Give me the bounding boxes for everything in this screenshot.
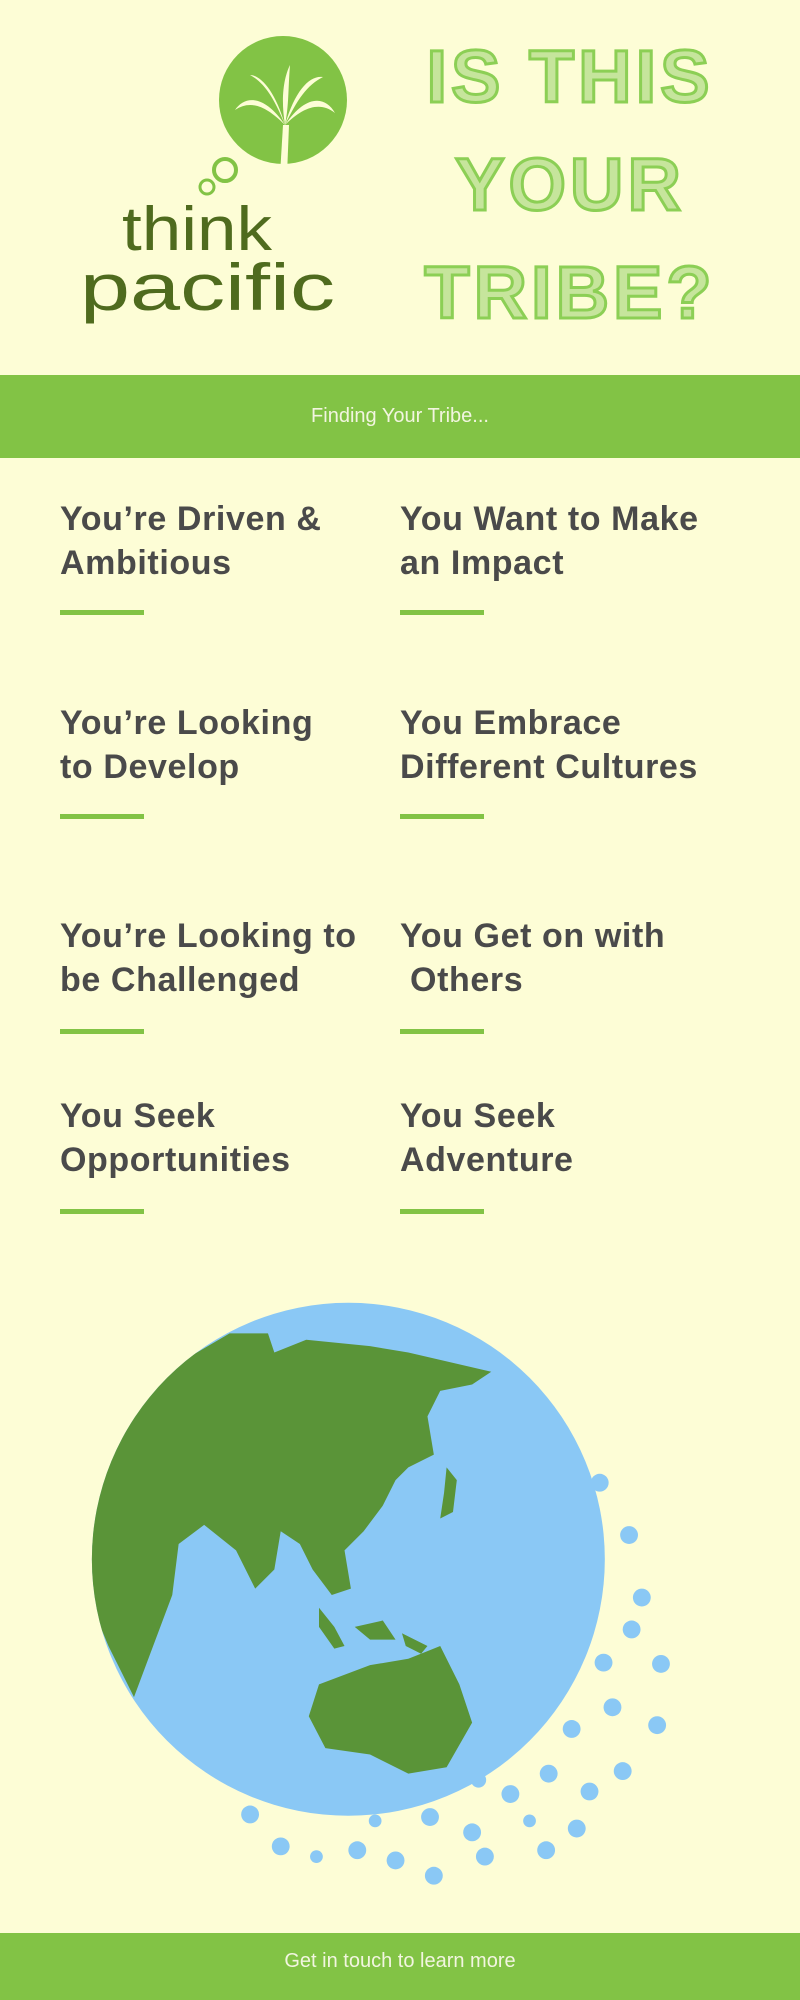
item 4: [400, 704, 698, 786]
item 4: Different Cultures: [400, 748, 698, 786]
footer banner: [0, 1933, 800, 2000]
icon: palm circle: [200, 36, 347, 194]
item 2: You Want to Make: [400, 500, 699, 538]
item 7: [60, 1097, 291, 1179]
logo text: think: [122, 195, 273, 264]
item 6: You Get on with: [400, 917, 665, 955]
globe illustration: [92, 1302, 670, 1885]
item 5: [60, 917, 357, 999]
item 7: Opportunities: [60, 1141, 291, 1179]
logo: pacific: [80, 250, 335, 324]
item 6: [400, 917, 665, 999]
title: [424, 35, 716, 334]
title: YOUR: [455, 143, 685, 226]
footer banner: Get in touch to learn more: [284, 1950, 516, 1972]
item 4: You Embrace: [400, 704, 621, 742]
item 3: [60, 704, 313, 786]
item 8: You Seek: [400, 1097, 555, 1135]
item 5: be Challenged: [60, 961, 300, 999]
title: IS THIS: [426, 35, 714, 118]
item 7: You Seek: [60, 1097, 215, 1135]
item 8: [400, 1097, 574, 1179]
item 6: Others: [410, 961, 523, 999]
item 2: [400, 500, 699, 582]
item 5: You’re Looking to: [60, 917, 357, 955]
logo: [80, 36, 347, 324]
item 3: You’re Looking: [60, 704, 313, 742]
banner: finding your tribe: [0, 375, 800, 458]
item 1: Ambitious: [60, 544, 232, 582]
item 1: You’re Driven &: [60, 500, 322, 538]
banner: finding your tribe: Finding Your Tribe...: [311, 405, 489, 427]
item 2: an Impact: [400, 544, 564, 582]
item 8: Adventure: [400, 1141, 574, 1179]
item 3: to Develop: [60, 748, 240, 786]
title: TRIBE?: [424, 251, 716, 334]
item 1: [60, 500, 322, 582]
